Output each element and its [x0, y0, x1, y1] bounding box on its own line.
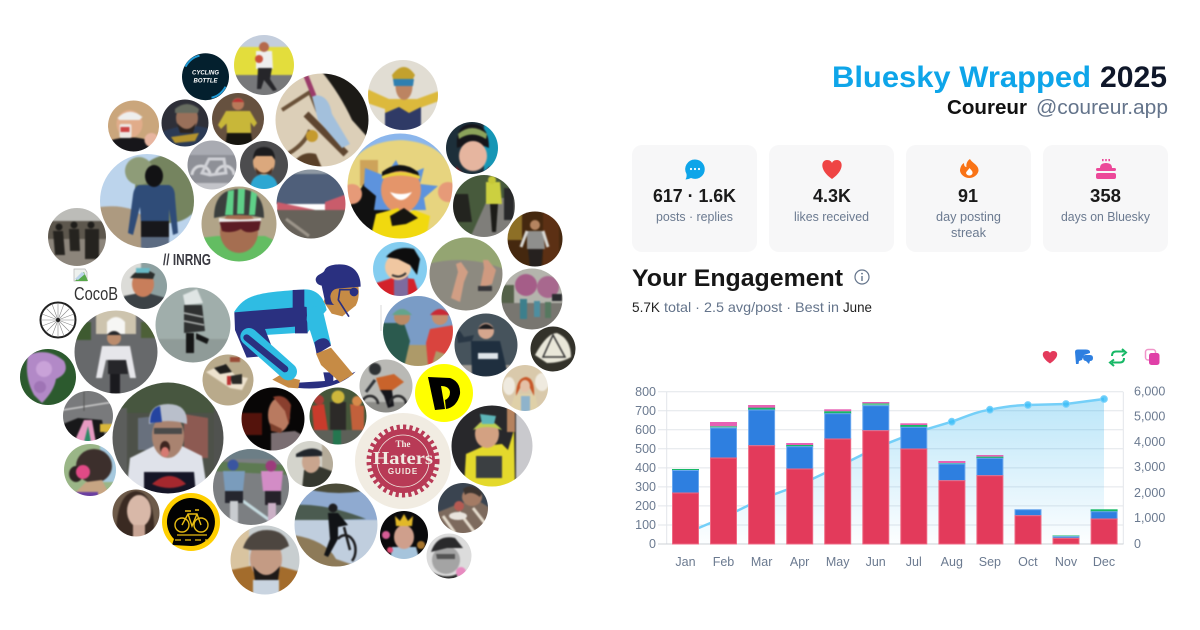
avatar: bike wheel — [40, 302, 76, 338]
cumulative points — [948, 396, 1107, 425]
left axis labels: 0 — [649, 537, 656, 551]
avatar: rider in blue jersey — [100, 154, 194, 248]
avatar: man in waistcoat — [508, 212, 562, 266]
avatar: cycling bottle logo: BOTTLE — [194, 79, 218, 85]
icon: speech bubble — [685, 159, 705, 180]
avatar: rider at Arc de Triomphe — [73, 309, 159, 395]
left axis labels: 600 — [635, 423, 656, 437]
logo: INRNG: // INRNG — [163, 252, 211, 269]
avatar: man in cap — [287, 441, 333, 487]
icon: heart — [822, 160, 842, 179]
legend icons — [1043, 349, 1160, 366]
stacked bars — [672, 402, 1118, 544]
panel: posts and replies: posts · replies — [656, 210, 733, 224]
chart: monthly engagement — [635, 384, 1165, 569]
icon: info — [855, 270, 869, 284]
avatar: yellow bicycle logo — [161, 492, 221, 552]
avatar: Jumbo Visma rider — [367, 59, 439, 131]
avatar: bagged statue — [154, 286, 232, 364]
avatar: lilac flowers — [20, 349, 76, 405]
avatar: bitmoji — [240, 141, 288, 189]
logo: broken image and CocoB text: CocoB — [74, 284, 118, 304]
avatar: riders under pink trees — [500, 267, 564, 331]
avatar: FDJ rider celebrating — [453, 312, 519, 378]
avatar: bearded man in cycling jersey — [162, 100, 208, 146]
avatar: cyclocross crowd — [275, 168, 347, 240]
title year: 2025 — [1100, 61, 1167, 94]
panel: posts and replies — [632, 145, 757, 252]
logo: broken image and CocoB text — [74, 269, 118, 304]
avatar: hair with pink flower — [62, 442, 118, 498]
logo: The Haters Guide badge — [353, 411, 453, 511]
right axis labels: 1,000 — [1134, 511, 1165, 525]
avatar: Bora rider in yellow — [450, 404, 534, 488]
icon: legend quotes — [1146, 350, 1160, 365]
avatar: man with crown — [380, 511, 428, 559]
vertical hairline — [380, 305, 382, 331]
right axis labels: 5,000 — [1134, 410, 1165, 424]
month labels: Oct — [1018, 555, 1038, 569]
month labels: Dec — [1093, 555, 1115, 569]
avatar: man with flat cap and beard — [229, 524, 301, 596]
panel: day posting streak: streak — [951, 226, 987, 240]
right axis labels: 2,000 — [1134, 486, 1165, 500]
panel: likes received: 4.3K — [813, 186, 851, 206]
avatar: rider by lake — [293, 482, 379, 568]
panel: days on Bluesky: days on Bluesky — [1061, 210, 1151, 224]
engagement summary: 5.7K — [632, 299, 661, 315]
right axis labels: 4,000 — [1134, 435, 1165, 449]
avatar: two riders talking — [382, 295, 454, 367]
avatar: woman with miffy toys — [502, 365, 548, 411]
handle: @coureur.app — [1036, 97, 1168, 119]
avatar: black and white cap selfie — [426, 534, 472, 578]
avatar: man with mohawk — [240, 386, 306, 452]
avatar: gravel group — [47, 207, 107, 267]
avatar: rider in orange — [360, 360, 412, 412]
month labels: Aug — [941, 555, 963, 569]
avatar: bike in snow — [188, 140, 236, 190]
avatar cloud — [18, 33, 577, 596]
cumulative line — [686, 399, 1104, 534]
avatar: thumbs up in water — [428, 236, 504, 312]
engagement summary: total · 2.5 avg/post · Best in — [664, 299, 839, 315]
avatar: yellow jersey portrait — [212, 93, 264, 145]
avatar: green helmet rider — [200, 185, 278, 264]
cumulative area — [686, 399, 1104, 544]
avatar: woman portrait — [111, 488, 161, 538]
left axis labels — [635, 385, 656, 551]
avatar: triangle bike logo — [530, 326, 576, 372]
avatar: smiling champion with blue star — [348, 134, 452, 238]
month labels: Nov — [1055, 555, 1078, 569]
month labels: Feb — [713, 555, 734, 569]
logo: The Haters Guide badge: Haters — [373, 448, 433, 468]
avatar: woman in beanie — [446, 122, 498, 174]
avatar: hook with pink bag — [61, 389, 115, 443]
heading: Your Engagement: Your Engagement — [632, 265, 843, 292]
avatar: rider with tongue out — [111, 381, 226, 495]
avatar: comic boy — [372, 241, 428, 297]
panel: days on Bluesky — [1043, 145, 1168, 252]
icon: legend replies — [1075, 350, 1093, 364]
grid lines — [658, 392, 1123, 525]
month labels: May — [826, 555, 850, 569]
avatar: man with mug — [108, 100, 159, 152]
month labels: Jan — [675, 555, 696, 569]
panel: likes received — [769, 145, 894, 252]
panel: posts and replies: 617 · 1.6K — [653, 186, 736, 206]
month labels: Sep — [979, 555, 1001, 569]
avatar: man with glasses and helmet — [121, 263, 167, 309]
logo: The Haters Guide badge: GUIDE — [388, 467, 418, 476]
right axis labels — [1134, 384, 1165, 551]
display name: Coureur — [947, 97, 1027, 119]
month labels: Jun — [866, 555, 886, 569]
left axis labels: 200 — [635, 499, 656, 513]
avatar: cycling bottle logo — [182, 53, 229, 100]
avatar: man eating in plaid shirt — [438, 483, 488, 533]
avatar: yellow D logo — [414, 363, 474, 423]
avatar: peloton — [308, 386, 368, 446]
engagement summary: June — [843, 299, 872, 315]
left axis labels: 400 — [635, 461, 656, 475]
month labels: Mar — [751, 555, 772, 569]
avatar: Japanese print cat — [201, 353, 255, 407]
icon: legend heart — [1043, 351, 1057, 364]
avatar: rider on yellow — [234, 35, 294, 95]
panel: day posting streak: 91 — [958, 186, 978, 206]
logo: The Haters Guide badge: The — [395, 439, 411, 449]
icon: cake — [1096, 159, 1116, 179]
panel: likes received: likes received — [794, 210, 869, 224]
avatar: rider in yellow among spectators — [452, 174, 516, 238]
right axis labels: 6,000 — [1134, 384, 1165, 398]
left axis labels: 700 — [635, 404, 656, 418]
month labels: Jul — [906, 555, 922, 569]
left axis labels: 500 — [635, 442, 656, 456]
icon: flame — [960, 159, 979, 178]
left axis labels: 100 — [635, 518, 656, 532]
avatar: parrot on perch — [274, 72, 370, 168]
avatar: two riders on road — [211, 447, 291, 527]
left axis labels: 800 — [635, 385, 656, 399]
icon: cyclist mascot — [234, 264, 361, 388]
month labels — [675, 555, 1115, 569]
title: Bluesky Wrapped — [832, 61, 1091, 94]
left axis labels: 300 — [635, 480, 656, 494]
right axis labels: 3,000 — [1134, 460, 1165, 474]
month labels: Apr — [790, 555, 809, 569]
panel: day posting streak: day posting — [936, 210, 1001, 224]
panel: day posting streak — [906, 145, 1031, 252]
icon: legend reposts — [1110, 349, 1126, 366]
right axis labels: 0 — [1134, 537, 1141, 551]
avatar: cycling bottle logo: CYCLING — [192, 71, 219, 77]
panel: days on Bluesky: 358 — [1090, 186, 1121, 206]
